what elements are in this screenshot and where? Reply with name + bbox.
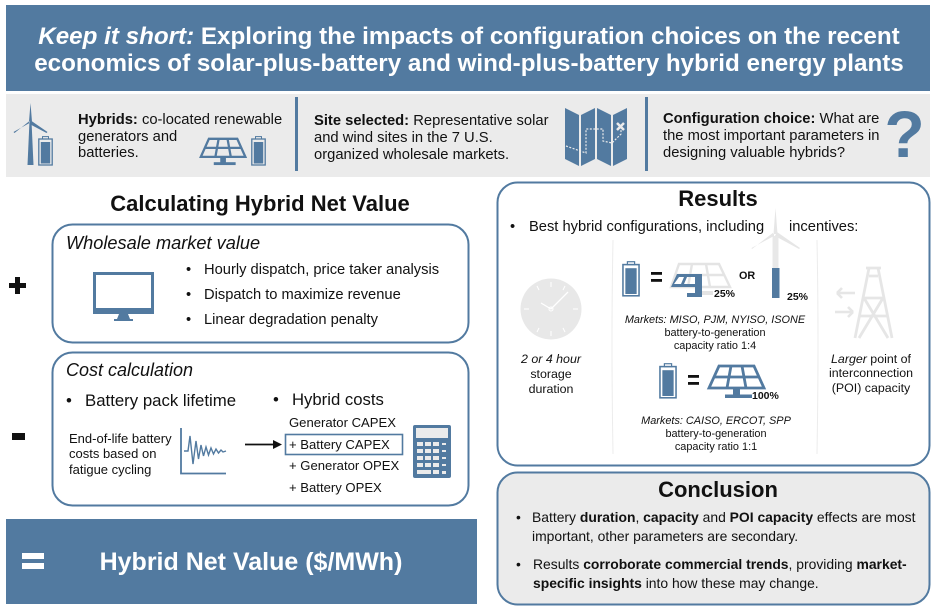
icon: solar panel with battery — [201, 137, 265, 165]
bullet list: • — [186, 287, 191, 303]
icon: battery equals wind or solar 25 percent — [623, 262, 809, 303]
panel: results — [498, 182, 930, 466]
bullet: battery pack lifetime: Battery pack lifetime — [85, 391, 236, 410]
icon: question mark: ? — [884, 97, 925, 171]
text: markets group 1: capacity ratio 1:4 — [674, 340, 756, 352]
bullet: duration: important, other parameters are secondary. — [532, 528, 798, 544]
icon: clock — [520, 278, 582, 340]
panel: conclusion — [498, 472, 930, 604]
highlighted panel quarter — [671, 274, 702, 295]
text: configuration choice: What are — [815, 111, 879, 127]
text: end of life: fatigue cycling — [69, 462, 151, 477]
bullet text: • — [510, 219, 515, 235]
bullet list: Linear degradation penalty — [204, 312, 379, 328]
bullet: hybrid costs: • — [273, 390, 279, 409]
text: site selected: and wind sites in the 7 U.S. — [314, 130, 493, 146]
heading: calculating hybrid net value: Calculating Hybrid Net Value — [110, 191, 410, 216]
panel: hybrid net value result — [6, 519, 477, 604]
icon: wind turbine with battery — [14, 103, 52, 165]
text: markets group 1: Markets: MISO, PJM, NYISO, ISONE — [625, 314, 806, 326]
bullet: duration: • — [516, 509, 521, 525]
chart: damped oscillation — [181, 428, 226, 474]
heading: conclusion: Conclusion — [658, 477, 778, 502]
faded panel — [671, 264, 730, 293]
bullet: trends: corroborate commercial trends, providing market- — [583, 556, 907, 572]
text: markets group 2: battery-to-generation — [665, 428, 767, 440]
text: storage duration: duration — [529, 382, 573, 396]
bullet: battery pack lifetime: • — [66, 391, 72, 410]
icon: battery equals wind or solar 25 percent: 25% — [787, 291, 809, 303]
title banner: Keep it short: Exploring the impacts of configuration choices on the recent — [38, 23, 900, 50]
text: poi capacity: point of — [867, 352, 912, 366]
text: hybrids: batteries. — [78, 145, 139, 161]
panel: introduction band — [6, 94, 930, 177]
text: hybrids: co-located renewable — [138, 112, 282, 128]
bullet text: incentives: — [789, 219, 858, 235]
text: markets group 2: Markets: CAISO, ERCOT, SPP — [641, 415, 792, 427]
text: configuration choice: designing valuable hybrids? — [663, 145, 845, 161]
title banner — [6, 5, 930, 91]
text: end of life: costs based on — [69, 446, 156, 461]
bullet list: Dispatch to maximize revenue — [204, 287, 401, 303]
text: markets group 1: battery-to-generation — [664, 327, 766, 339]
text: cost items: + Generator OPEX — [289, 458, 400, 473]
text: hybrids: Hybrids: — [78, 112, 138, 128]
icon: plus sign — [9, 277, 26, 294]
label: Hybrid Net Value ($/MWh) — [100, 548, 402, 576]
text: storage duration: storage — [530, 367, 572, 381]
text: site selected: Site selected: — [314, 113, 409, 129]
bullet list: • — [186, 312, 191, 328]
heading: cost: Cost calculation — [66, 360, 193, 380]
bullet: trends: into how these may change. — [642, 575, 819, 591]
bullet: trends: Results — [533, 556, 583, 572]
icon: transmission tower — [835, 268, 892, 338]
title banner: economics of solar-plus-battery and wind-plus-battery hybrid energy plants — [34, 50, 904, 77]
text: cost items: + Battery CAPEX — [289, 437, 390, 452]
bullet: trends: specific insights — [533, 575, 642, 591]
icon: battery equals wind or solar 25 percent: OR — [739, 270, 755, 282]
text: hybrids: generators and — [78, 129, 177, 145]
text: cost items: Generator CAPEX — [289, 415, 396, 430]
text: configuration choice: Configuration choice: — [663, 111, 815, 127]
text: poi capacity: Larger — [831, 352, 868, 366]
bullet list: Hourly dispatch, price taker analysis — [204, 262, 439, 278]
bullet: hybrid costs: Hybrid costs — [292, 390, 384, 409]
heading: results: Results — [678, 186, 758, 211]
text: markets group 2: capacity ratio 1:1 — [675, 441, 757, 453]
icon: monitor — [93, 272, 154, 321]
panel: cost calculation — [52, 352, 468, 506]
bracket lines — [612, 240, 818, 454]
text: cost items: + Battery OPEX — [289, 480, 382, 495]
icon: minus sign — [12, 433, 25, 440]
text: site selected: Representative solar — [409, 113, 549, 129]
bullet: duration: duration, capacity and POI capacity effects are most — [580, 509, 916, 525]
text: site selected: organized wholesale markets. — [314, 147, 509, 163]
bullet: trends: • — [516, 556, 521, 572]
text: poi capacity: interconnection — [829, 366, 913, 380]
icon: battery equals solar 100 percent: 100% — [752, 390, 780, 402]
text: end of life: End-of-life battery — [69, 431, 172, 446]
icon: battery equals wind or solar 25 percent: 25% — [714, 288, 736, 300]
equals sign — [22, 553, 44, 569]
icon: map — [565, 108, 627, 166]
arrow — [245, 440, 282, 449]
icon: battery equals solar 100 percent — [660, 364, 780, 402]
heading: wholesale: Wholesale market value — [66, 233, 260, 253]
bullet text: Best hybrid configurations, including — [529, 219, 764, 235]
bullet list: • — [186, 262, 191, 278]
text: poi capacity: (POI) capacity — [832, 381, 911, 395]
text: configuration choice: the most important parameters in — [663, 128, 879, 144]
bullet: duration: Battery — [532, 509, 580, 525]
icon: calculator — [413, 425, 451, 478]
icon: faded wind turbine — [752, 208, 800, 268]
panel: wholesale market value — [52, 224, 468, 342]
text: storage duration: 2 or 4 hour — [520, 352, 582, 366]
